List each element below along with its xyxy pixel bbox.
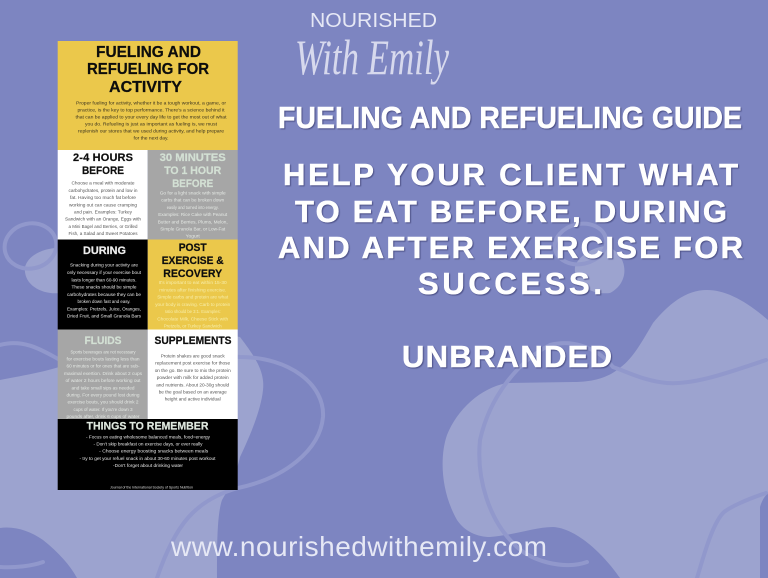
main message bbox=[278, 157, 743, 301]
body text: Examples: Pretzels, Juice, Oranges, bbox=[67, 306, 141, 312]
body text bbox=[155, 354, 231, 403]
intro text: replenish our stores that we used during activity, and help prepare bbox=[78, 129, 224, 135]
intro text bbox=[76, 101, 227, 142]
body text: Go for a light snack with simple bbox=[160, 191, 226, 197]
reminder list bbox=[80, 434, 216, 469]
body text: These snacks should be simple bbox=[72, 285, 137, 291]
body text: easily and turned into energy. bbox=[167, 205, 219, 211]
heading: 30 MINUTES bbox=[160, 152, 226, 164]
main message: SUCCESS. bbox=[418, 266, 602, 301]
intro text: Proper fueling for activity, whether it be a tough workout, a game, or bbox=[76, 101, 226, 107]
body text: Examples: Rice Cake with Peanut bbox=[158, 212, 228, 218]
body text: It's important to eat within 15-30 bbox=[159, 280, 227, 286]
heading: BEFORE bbox=[82, 165, 124, 177]
panel: 30 minutes to 1 hour before bbox=[148, 150, 238, 240]
reminder list: - try to get your refuel snack in about 30-60 minutes post workout bbox=[80, 456, 216, 462]
panel: 2-4 hours before bbox=[58, 150, 148, 240]
panel: during bbox=[58, 240, 148, 330]
body text: Protein shakes are good snack bbox=[161, 354, 225, 360]
body text: maximal exertion. Drink about 2 cups bbox=[64, 371, 143, 377]
body text: of water 2 hours before working out bbox=[66, 378, 141, 384]
body text: Simple Granola Bar, or Low-Fat bbox=[160, 226, 226, 232]
body text: 60 minutes or for ones that are sub- bbox=[66, 364, 140, 370]
body text: Sports beverages are not necessary bbox=[70, 349, 136, 355]
heading: RECOVERY bbox=[163, 268, 223, 280]
body text: for exercise bouts lasting less than bbox=[66, 357, 140, 363]
source citation: Journal of the International Society of Sports Nutrition bbox=[110, 486, 193, 490]
heading: TO 1 HOUR bbox=[164, 165, 221, 177]
reminder list: -Don't forget about drinking water bbox=[113, 463, 183, 469]
body text bbox=[65, 181, 141, 237]
heading: SUPPLEMENTS bbox=[154, 335, 232, 347]
intro text: practice, is the key to top performance. There's a science behind it bbox=[78, 108, 225, 114]
unbranded label: UNBRANDED bbox=[402, 339, 612, 374]
heading bbox=[160, 152, 226, 190]
reminder list: - Focus on eating wholesome balanced meals, food=energy bbox=[86, 434, 211, 440]
body text: during. For every pound lost during bbox=[66, 392, 140, 398]
body text: Snacking during your activity are bbox=[70, 263, 138, 269]
body text: height and active individual bbox=[165, 397, 221, 403]
body text: fat. Having too much fat before bbox=[70, 195, 136, 201]
body text: working out can cause cramping bbox=[69, 202, 137, 208]
body text: Chocolate Milk, Cheese Stick with bbox=[157, 316, 228, 322]
body text bbox=[158, 191, 228, 239]
body text: a Mini Bagel and Berries, or Grilled bbox=[68, 224, 138, 230]
body text bbox=[67, 263, 142, 319]
body text: and nutrients. About 20-30g should bbox=[156, 382, 229, 388]
body text: ratio should be 3:1. Examples: bbox=[165, 309, 221, 315]
body text: on the go. Be sure to mix the protein bbox=[155, 368, 231, 374]
body text: minutes after finishing exercise. bbox=[159, 287, 226, 293]
body text: Dried Fruit, and Small Granola Bars bbox=[67, 313, 142, 319]
poster title: REFUELING FOR bbox=[87, 61, 209, 78]
heading bbox=[73, 152, 133, 177]
heading: DURING bbox=[83, 245, 126, 257]
heading: THINGS TO REMEMBER bbox=[86, 420, 209, 432]
body text: Simple carbs and protein are what bbox=[157, 295, 229, 301]
intro text: for the next day. bbox=[134, 136, 168, 142]
body text bbox=[155, 280, 230, 329]
body text: exercise bouts, you should drink 2 bbox=[68, 400, 139, 406]
main message: HELP YOUR CLIENT WHAT bbox=[283, 157, 738, 192]
panel: supplements bbox=[148, 330, 238, 419]
body text: only necessary if your exercise bout bbox=[67, 270, 142, 276]
heading: 2-4 HOURS bbox=[73, 152, 133, 164]
body text: Pretzels, or Turkey Sandwich bbox=[164, 323, 222, 329]
website url: www.nourishedwithemily.com bbox=[170, 531, 547, 562]
panel: things to remember bbox=[58, 419, 238, 490]
panel: post exercise and recovery bbox=[148, 240, 238, 330]
body text: Yogurt bbox=[186, 233, 200, 239]
panel: fluids bbox=[58, 330, 148, 420]
poster title: FUELING AND bbox=[96, 44, 201, 61]
body text: be the goal based on an average bbox=[159, 390, 227, 396]
logo wordmark: NOURISHED bbox=[310, 10, 437, 32]
poster title bbox=[87, 44, 209, 96]
body text: your body is craving. Carb to protein bbox=[155, 302, 230, 308]
heading: POST bbox=[179, 242, 207, 254]
intro text: you do. Refueling is just as important as fueling is, we must bbox=[85, 122, 218, 128]
poster title: ACTIVITY bbox=[109, 79, 182, 96]
body text: and take small sips as needed bbox=[72, 385, 135, 391]
main message: TO EAT BEFORE, DURING bbox=[295, 194, 727, 229]
body text: broken down fast and easy. bbox=[78, 299, 130, 305]
logo script: With Emily bbox=[295, 29, 450, 85]
body text: and pain. Examples: Turkey bbox=[74, 209, 133, 215]
body text: carbohydrates because they can be bbox=[67, 292, 141, 298]
body text: Fish, a Salad and Sweet Potatoes bbox=[68, 231, 138, 237]
body text: lasts longer than 60-90 minutes. bbox=[72, 277, 136, 283]
body text: powder with milk for added protein bbox=[157, 375, 229, 381]
body text: Sandwich with an Orange, Eggs with bbox=[65, 217, 141, 223]
poster: fueling and refueling for activity bbox=[58, 41, 238, 490]
reminder list: - Choose energy boosting snacks between meals bbox=[99, 449, 209, 455]
heading: FLUIDS bbox=[84, 335, 122, 347]
body text: pounds after, drink 6 cups of water bbox=[66, 414, 140, 420]
body text: replacement post exercise for those bbox=[155, 361, 230, 367]
body text bbox=[64, 349, 143, 420]
heading: EXERCISE & bbox=[162, 255, 224, 267]
reminder list: - Don't skip breakfast on exercise days, or ever really bbox=[94, 441, 203, 447]
main message: AND AFTER EXERCISE FOR bbox=[278, 230, 743, 265]
panel: header bbox=[58, 41, 238, 150]
heading bbox=[162, 242, 224, 280]
logo: nourished with emily bbox=[295, 10, 450, 85]
heading: BEFORE bbox=[172, 178, 213, 190]
background blobs bbox=[0, 219, 768, 578]
intro text: that can be applied to your every day life to get the most out of what bbox=[76, 115, 227, 121]
body text: carbohydrates, protein and low in bbox=[68, 188, 138, 194]
body text: carbs that can be broken down bbox=[161, 198, 224, 204]
body text: Choose a meal with moderate bbox=[72, 181, 135, 187]
body text: Butter and Berries, Plums, Melon, bbox=[158, 219, 228, 225]
body text: cups of water. If you're down 3 bbox=[74, 407, 133, 413]
